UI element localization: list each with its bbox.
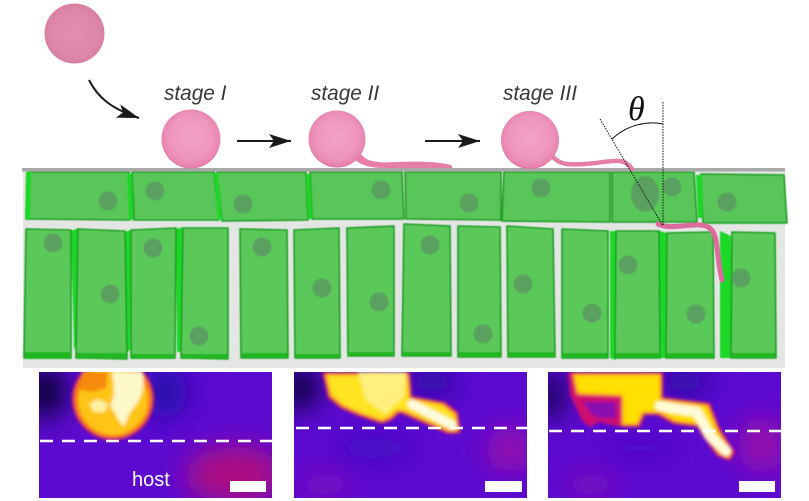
tissue background xyxy=(23,171,785,368)
dashed host boundary lines xyxy=(40,428,781,441)
label: stage III: stage III xyxy=(503,82,577,105)
cell base highlights xyxy=(25,352,776,359)
angle annotation: theta xyxy=(600,91,663,226)
icon: free bacterium sphere xyxy=(44,4,104,64)
panel: heat map stage I xyxy=(39,372,272,498)
arrow: stage II to III xyxy=(425,140,480,142)
label: stage II: stage II xyxy=(311,82,379,105)
arrow: stage I to II xyxy=(237,140,291,142)
panel: heat map stage II xyxy=(294,372,527,498)
panel: host cell tissue xyxy=(24,172,787,360)
scale bars xyxy=(230,481,775,492)
panel: heat map stage III xyxy=(538,370,786,498)
icon: stage I sphere xyxy=(162,110,220,168)
icon: stage II sphere with tail xyxy=(308,110,452,168)
arrow: approach to surface xyxy=(89,80,139,118)
top cell layer xyxy=(26,172,787,223)
cell nuclei xyxy=(44,176,750,346)
bottom cell layer xyxy=(24,224,776,359)
label: host: host xyxy=(132,469,170,491)
bright green cell walls xyxy=(25,172,731,360)
angle annotation: theta: θ xyxy=(628,91,645,128)
icon: stage III sphere with penetrating tail xyxy=(501,111,722,280)
host membrane xyxy=(22,168,785,172)
label: stage I: stage I xyxy=(164,82,227,105)
